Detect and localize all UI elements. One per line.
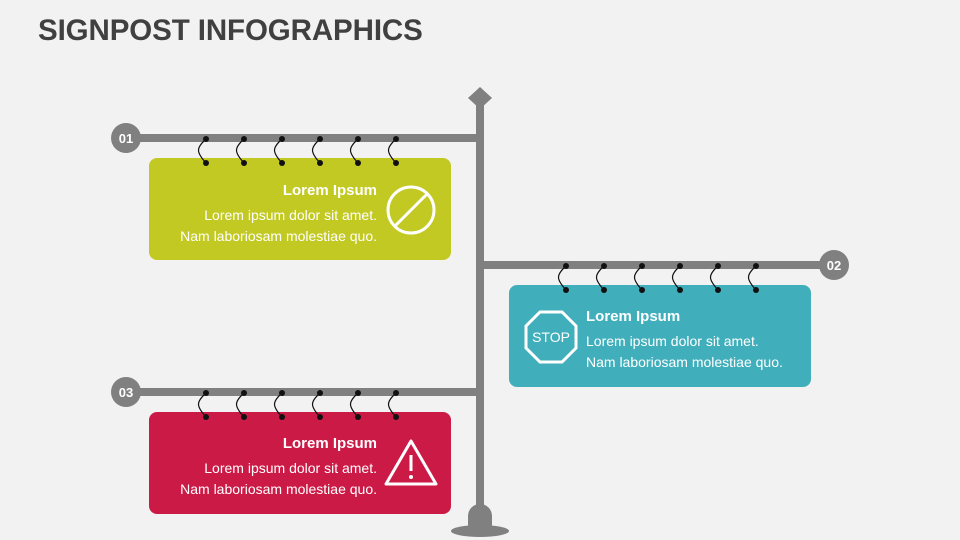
text 03: Lorem ipsum dolor sit amet. (204, 460, 377, 476)
text 02 (586, 308, 783, 370)
icon: stop: STOP (532, 329, 570, 345)
text 01: Lorem ipsum dolor sit amet. (204, 207, 377, 223)
icon: no sign (386, 186, 436, 234)
panel 01 (149, 158, 451, 260)
text 03 (180, 435, 377, 497)
arm 01 (111, 123, 480, 153)
pole (451, 87, 509, 537)
text 02: Lorem Ipsum (586, 308, 680, 325)
icon: warning (384, 439, 438, 486)
text 03: Lorem Ipsum (283, 435, 377, 452)
panel 02 (509, 285, 811, 387)
text 01: Lorem Ipsum (283, 182, 377, 199)
text 01 (180, 182, 377, 244)
arm 02 (480, 250, 849, 280)
text 01: Nam laboriosam molestiae quo. (180, 228, 377, 244)
panel 03 (149, 412, 451, 514)
arm 02: 02 (827, 258, 841, 273)
icon: stop (524, 310, 578, 364)
text 03: Nam laboriosam molestiae quo. (180, 481, 377, 497)
arm 01: 01 (119, 131, 133, 146)
arm 03: 03 (119, 385, 133, 400)
text 02: Lorem ipsum dolor sit amet. (586, 333, 759, 349)
text 02: Nam laboriosam molestiae quo. (586, 354, 783, 370)
arm 03 (111, 377, 480, 407)
title: SIGNPOST INFOGRAPHICS (38, 14, 423, 47)
